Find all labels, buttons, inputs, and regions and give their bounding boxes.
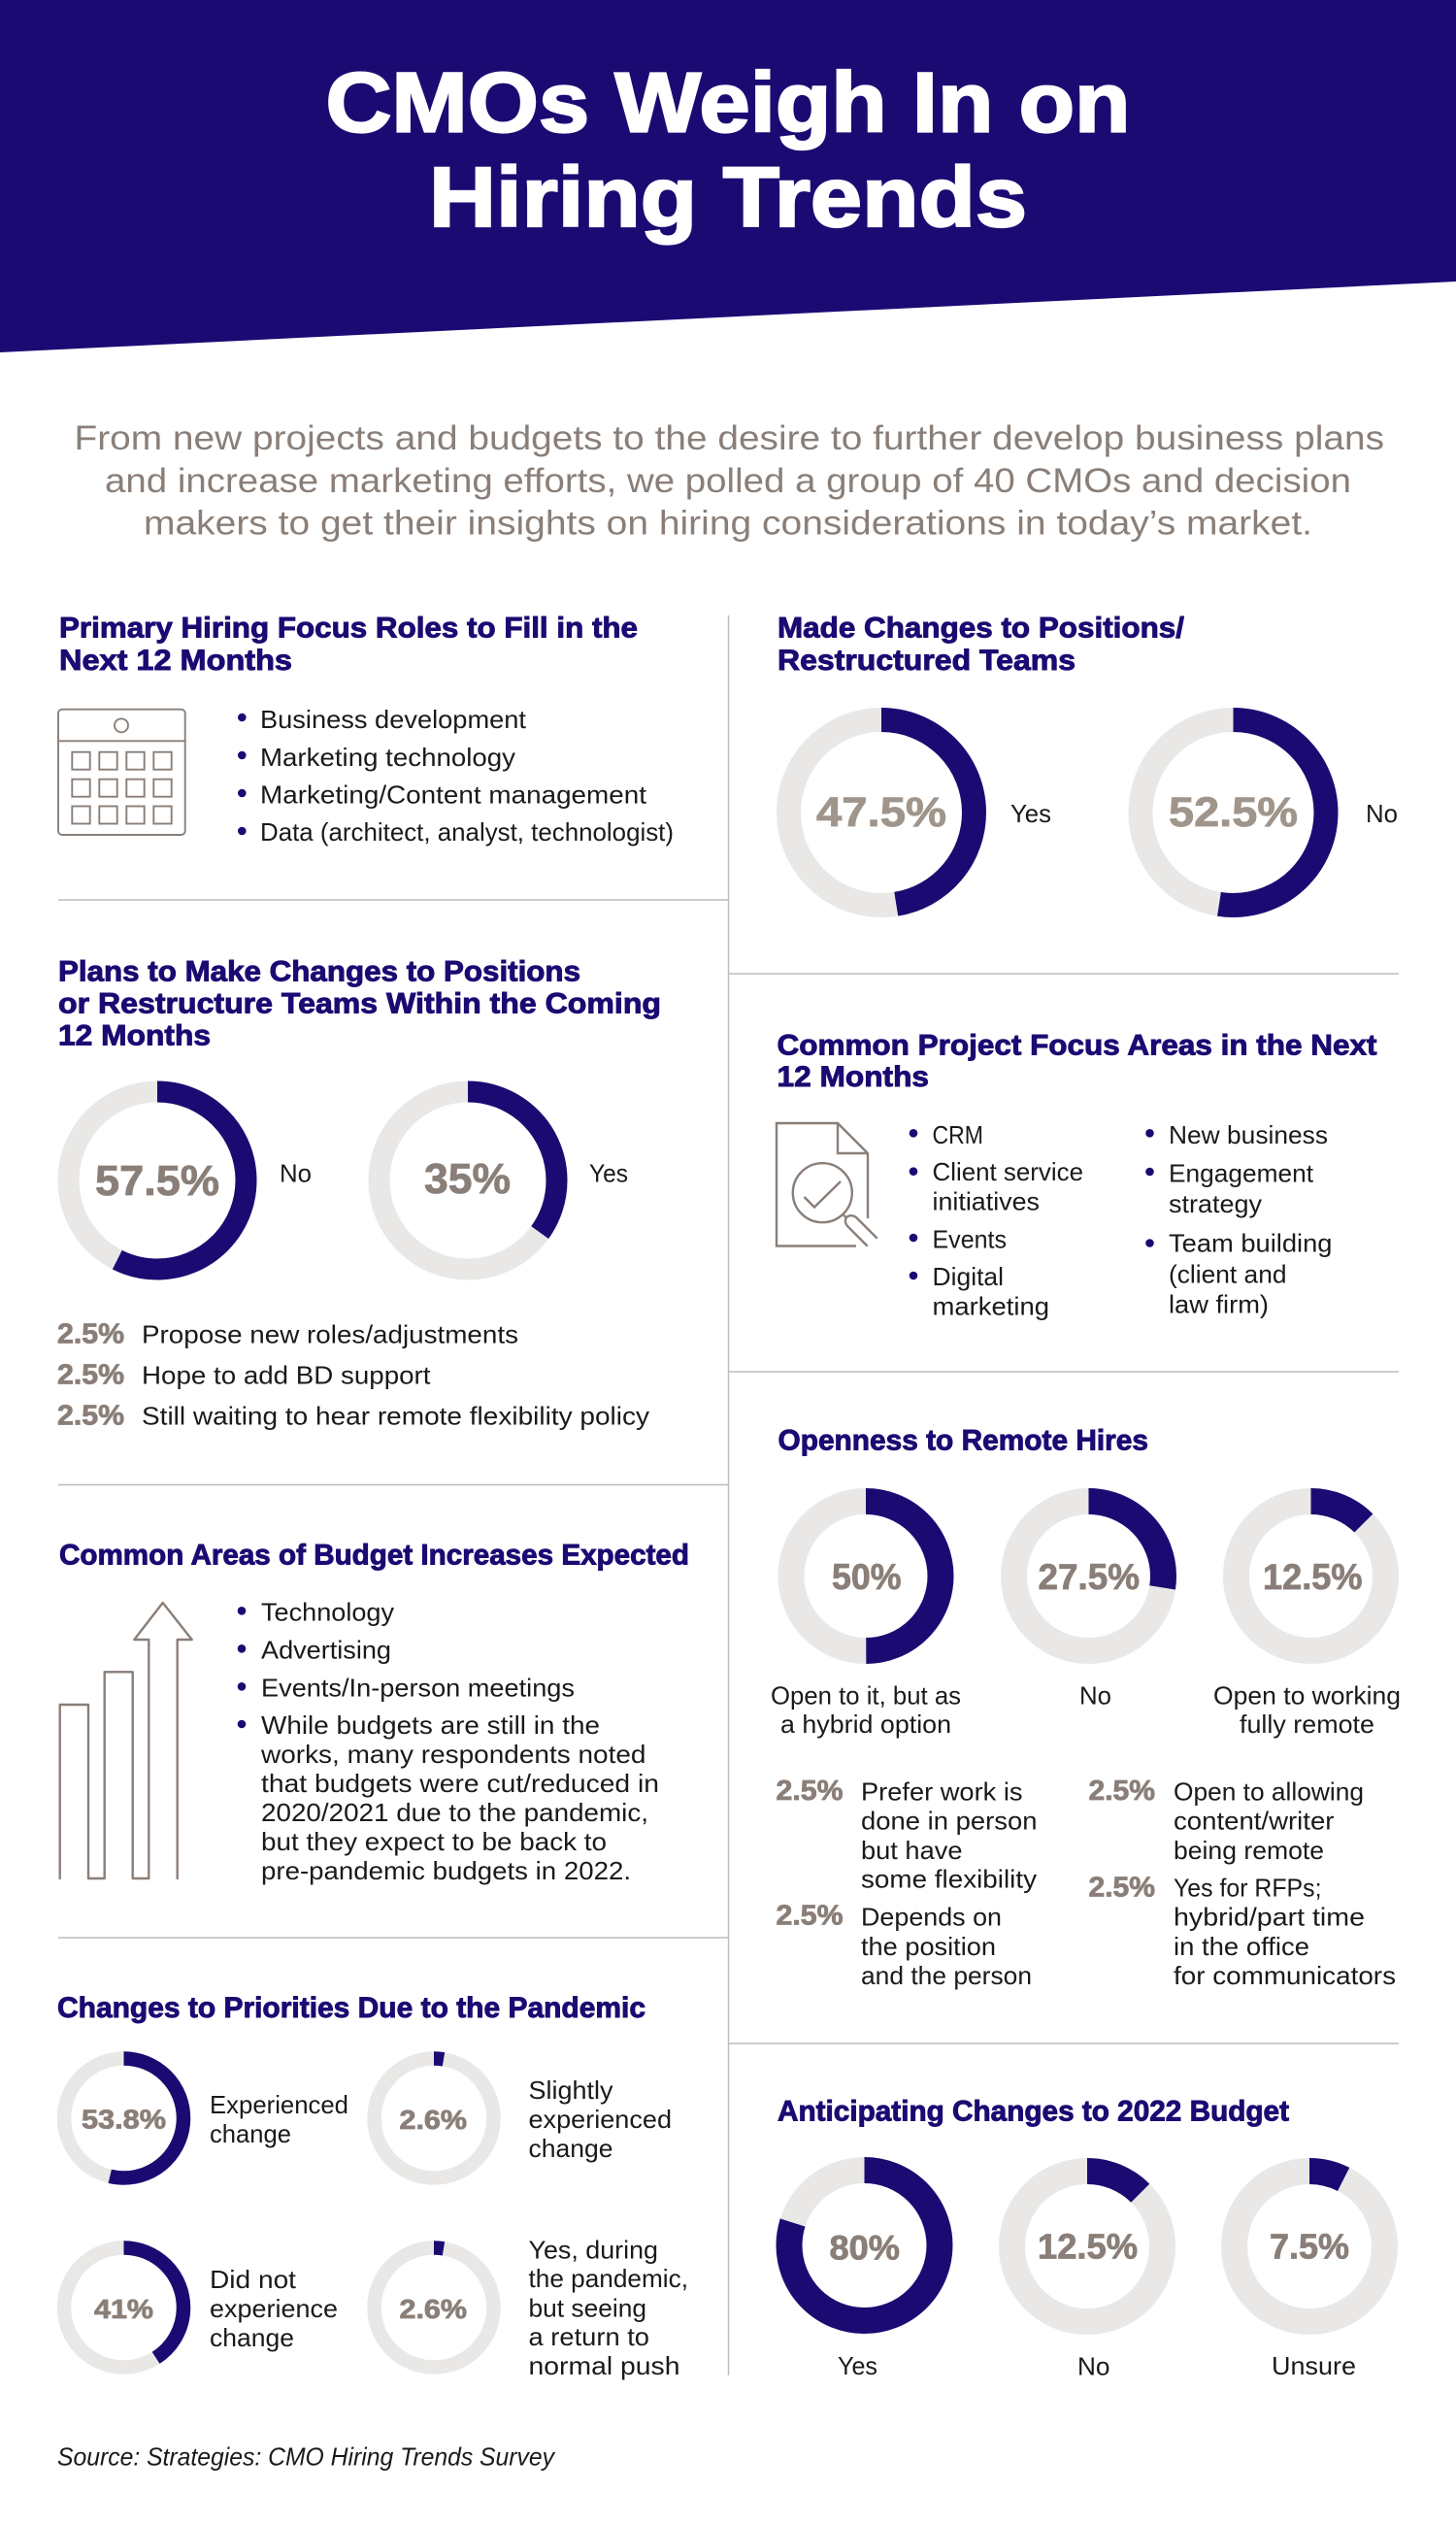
- donut: 41% did not experience change: change: [210, 2323, 294, 2352]
- donut: 80% yes: [789, 2171, 940, 2380]
- donut: 35% yes: [379, 1091, 628, 1270]
- bullet list: budget areas: 2020/2021 due to the pandemic,: [261, 1798, 648, 1827]
- donut: 35% yes: Yes: [589, 1159, 628, 1188]
- bullet list: hiring roles: Business development: [260, 705, 527, 734]
- list: remote responses column 1: 2.5%: [777, 1901, 844, 1932]
- bullet list: budget areas: [238, 1598, 659, 1885]
- bullet list: project focus column 1: marketing: [932, 1291, 1049, 1320]
- bullet list: budget areas: but they expect to be back to: [261, 1827, 607, 1856]
- bullet list: hiring roles: Marketing/Content management: [260, 780, 647, 810]
- donut: 50% hybrid option: Open to it, but as: [771, 1681, 961, 1710]
- bullet list: hiring roles: Marketing technology: [260, 743, 515, 772]
- donut: 27.5% no: No: [1079, 1681, 1111, 1710]
- heading: project focus: Common Project Focus Areas in the Next: [777, 1029, 1377, 1062]
- donut: 12.5% no: [1011, 2171, 1163, 2380]
- donut: 2.6% yes during the pandemic: 2.6%: [400, 2294, 467, 2324]
- intro text: and increase marketing efforts, we polled a group of 40 CMOs and decision: [105, 461, 1351, 500]
- heading: plans to make changes: or Restructure Teams Within the Coming: [58, 988, 661, 1019]
- donut: 50% hybrid option: a hybrid option: [780, 1710, 951, 1739]
- donut: 12.5% no: 12.5%: [1038, 2227, 1138, 2266]
- list: remote responses column 2: content/writer: [1174, 1806, 1335, 1835]
- bullet list: project focus column 1: Client service: [932, 1157, 1083, 1186]
- bullet list: project focus column 2: strategy: [1169, 1189, 1262, 1218]
- donut: 7.5% unsure: [1235, 2171, 1384, 2380]
- donut: 2.6% slightly experienced change: 2.6%: [400, 2105, 467, 2135]
- donut: 50% hybrid option: [771, 1501, 961, 1739]
- donut: 35% yes: 35%: [424, 1155, 511, 1203]
- bullet list: budget areas: that budgets were cut/reduced in: [261, 1769, 659, 1798]
- donut: 53.8% experienced change: Experienced: [210, 2090, 348, 2119]
- bullet list: project focus column 2: [1145, 1120, 1332, 1318]
- donut: 41% did not experience change: Did not: [210, 2265, 297, 2294]
- donut: 12.5% fully remote: 12.5%: [1263, 1557, 1363, 1597]
- list: other plan responses: 2.5%: [57, 1400, 124, 1431]
- list: remote responses column 2: hybrid/part time: [1174, 1903, 1365, 1932]
- bullet list: budget areas: Advertising: [261, 1635, 391, 1664]
- list: remote responses column 2: for communicators: [1174, 1961, 1396, 1990]
- heading: changes to priorities: Changes to Priorities Due to the Pandemic: [57, 1992, 645, 2024]
- panel: common areas of budget increases: [59, 1540, 689, 1885]
- donut: 2.6% yes during the pandemic: a return to: [528, 2322, 649, 2351]
- heading: plans to make changes: 12 Months: [58, 1019, 211, 1052]
- list: remote responses column 1: Depends on: [861, 1903, 1002, 1932]
- donut: 12.5% no: No: [1077, 2351, 1110, 2380]
- list: other plan responses: 2.5%: [57, 1359, 124, 1390]
- title: Hiring Trends: [429, 150, 1027, 245]
- donut: 57.5% no: 57.5%: [95, 1157, 219, 1205]
- panel: changes to priorities: [57, 1992, 688, 2380]
- list: other plan responses: [57, 1318, 649, 1431]
- list: remote responses column 2: Yes for RFPs;: [1174, 1874, 1322, 1903]
- panel: primary hiring focus roles: [58, 613, 674, 847]
- intro text: From new projects and budgets to the desire to further develop business plans: [74, 418, 1384, 457]
- list: remote responses column 1: done in person: [861, 1806, 1037, 1835]
- donut: 47.5% yes: Yes: [1010, 799, 1051, 828]
- bullet list: project focus column 1: Digital: [932, 1262, 1004, 1291]
- list: remote responses column 1: Prefer work is: [861, 1777, 1023, 1806]
- list: remote responses column 2: 2.5%: [1089, 1776, 1155, 1807]
- donut: 57.5% no: [68, 1091, 312, 1270]
- list: remote responses column 2: in the office: [1174, 1932, 1309, 1961]
- icon: rising bars with arrow: [60, 1603, 192, 1878]
- list: remote responses column 1: 2.5%: [777, 1776, 844, 1807]
- icon: document with magnifier: [777, 1123, 877, 1246]
- heading: primary hiring focus: [59, 613, 638, 677]
- donut: 80% yes: Yes: [838, 2351, 877, 2380]
- heading: primary hiring focus: Primary Hiring Focus Roles to Fill in the: [59, 613, 638, 645]
- donut: 2.6% yes during the pandemic: Yes, during: [528, 2235, 658, 2264]
- heading: primary hiring focus: Next 12 Months: [59, 645, 292, 677]
- bullet list: project focus column 2: (client and: [1169, 1260, 1287, 1289]
- donut: 2.6% yes during the pandemic: but seeing: [528, 2293, 646, 2322]
- donut: 50% hybrid option: 50%: [832, 1557, 901, 1597]
- heading: made changes: Made Changes to Positions/: [778, 613, 1184, 645]
- bullet list: project focus column 2: Team building: [1169, 1229, 1332, 1258]
- heading: budget increases: Common Areas of Budget Increases Expected: [59, 1540, 689, 1571]
- heading: plans to make changes: [58, 955, 661, 1052]
- bullet list: budget areas: Events/In-person meetings: [261, 1674, 575, 1703]
- list: remote responses column 2: Open to allowing: [1174, 1777, 1364, 1806]
- title: [326, 56, 1130, 245]
- donut: 53.8% experienced change: [64, 2058, 348, 2178]
- list: remote responses column 1: some flexibility: [861, 1864, 1037, 1893]
- donut: 2.6% slightly experienced change: change: [528, 2134, 613, 2163]
- header banner: [0, 0, 1456, 352]
- intro text: makers to get their insights on hiring considerations in today’s market.: [144, 503, 1312, 542]
- donut: 2.6% yes during the pandemic: the pandemic,: [528, 2264, 688, 2293]
- list: remote responses column 2: [1089, 1776, 1396, 1990]
- panel: openness to remote hires: [771, 1425, 1401, 1990]
- list: remote responses column 1: [777, 1776, 1037, 1990]
- donut: 53.8% experienced change: 53.8%: [82, 2105, 166, 2134]
- donut: 41% did not experience change: [64, 2248, 338, 2367]
- list: remote responses column 1: and the person: [861, 1961, 1032, 1990]
- list: remote responses column 2: 2.5%: [1089, 1872, 1155, 1903]
- donut: 2.6% yes during the pandemic: [375, 2235, 688, 2380]
- panel: made changes to positions: [778, 613, 1398, 905]
- donut: 2.6% slightly experienced change: experienced: [528, 2105, 672, 2134]
- bullet list: hiring roles: [238, 705, 674, 847]
- heading: made changes: [778, 613, 1184, 677]
- donut: 53.8% experienced change: change: [210, 2119, 291, 2148]
- list: other plan responses: 2.5%: [57, 1318, 124, 1349]
- donut: 7.5% unsure: Unsure: [1272, 2351, 1356, 2380]
- heading: plans to make changes: Plans to Make Changes to Positions: [58, 955, 580, 988]
- list: other plan responses: Propose new roles/adjustments: [142, 1320, 518, 1349]
- heading: made changes: Restructured Teams: [778, 645, 1075, 677]
- bullet list: budget areas: works, many respondents noted: [260, 1740, 646, 1769]
- donut: 2.6% yes during the pandemic: normal push: [528, 2351, 679, 2380]
- heading: project focus: 12 Months: [777, 1061, 929, 1093]
- donut: 2.6% slightly experienced change: Slightly: [528, 2076, 613, 2105]
- bullet list: project focus column 2: Engagement: [1169, 1159, 1314, 1188]
- donut: 7.5% unsure: 7.5%: [1270, 2227, 1349, 2266]
- list: remote responses column 1: but have: [861, 1836, 963, 1865]
- donut: 27.5% no: [1013, 1501, 1163, 1710]
- panel: plans to make changes: [57, 955, 661, 1431]
- bullet list: hiring roles: Data (architect, analyst, technologist): [260, 817, 674, 847]
- bullet list: project focus column 1: [910, 1120, 1083, 1320]
- panel: anticipating changes to 2022 budget: [778, 2095, 1384, 2380]
- bullet list: project focus column 1: Events: [932, 1225, 1007, 1254]
- heading: anticipating changes: Anticipating Changes to 2022 Budget: [778, 2095, 1289, 2128]
- source note: Source: Strategies: CMO Hiring Trends Survey: [57, 2442, 556, 2472]
- donut: 52.5% no: [1141, 720, 1398, 905]
- list: other plan responses: Hope to add BD support: [142, 1361, 431, 1390]
- donut: 57.5% no: No: [280, 1159, 312, 1188]
- donut: 52.5% no: No: [1366, 799, 1398, 828]
- icon: calendar: [58, 710, 185, 835]
- bullet list: project focus column 1: CRM: [932, 1120, 983, 1149]
- donut: 12.5% fully remote: [1213, 1501, 1401, 1739]
- donut: 52.5% no: 52.5%: [1169, 789, 1298, 836]
- bullet list: project focus column 1: initiatives: [932, 1186, 1040, 1215]
- donut: 27.5% no: 27.5%: [1039, 1557, 1140, 1597]
- list: remote responses column 2: being remote: [1174, 1836, 1324, 1865]
- heading: openness to remote hires: Openness to Remote Hires: [778, 1425, 1148, 1456]
- bullet list: project focus column 2: law firm): [1169, 1289, 1269, 1318]
- donut: 41% did not experience change: 41%: [94, 2294, 153, 2324]
- donut: 47.5% yes: 47.5%: [816, 789, 946, 836]
- donut: 47.5% yes: [788, 720, 1051, 905]
- bullet list: budget areas: Technology: [261, 1598, 394, 1627]
- panel: common project focus areas: [777, 1029, 1377, 1320]
- donut: 2.6% slightly experienced change: [375, 2058, 672, 2178]
- donut: 12.5% fully remote: fully remote: [1240, 1710, 1374, 1739]
- bullet list: project focus column 2: New business: [1169, 1120, 1328, 1149]
- list: other plan responses: Still waiting to hear remote flexibility policy: [142, 1402, 649, 1431]
- heading: project focus: [777, 1029, 1377, 1093]
- intro text: [74, 418, 1384, 542]
- donut: 41% did not experience change: experience: [210, 2294, 338, 2323]
- donut: 80% yes: 80%: [829, 2229, 900, 2268]
- title: CMOs Weigh In on: [326, 56, 1130, 149]
- bullet list: budget areas: pre-pandemic budgets in 2022.: [261, 1856, 631, 1885]
- bullet list: budget areas: While budgets are still in the: [261, 1710, 600, 1740]
- list: remote responses column 1: the position: [861, 1932, 996, 1961]
- donut: 12.5% fully remote: Open to working: [1213, 1681, 1401, 1710]
